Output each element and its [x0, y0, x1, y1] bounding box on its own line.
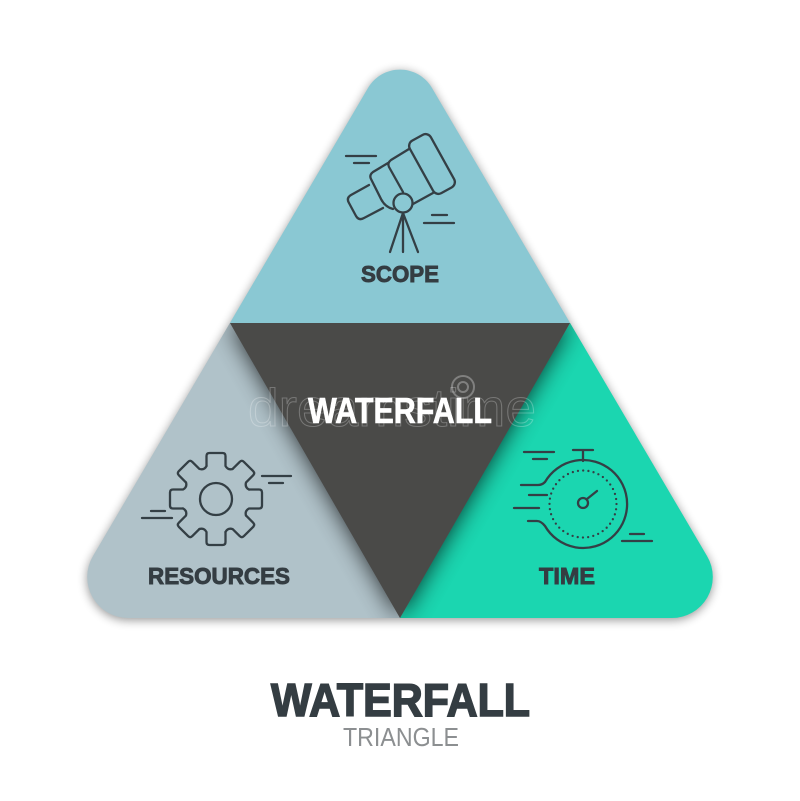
- label: scope: SCOPE: [361, 261, 439, 287]
- waterfall triangle diagram: [87, 70, 713, 618]
- label: resources: RESOURCES: [148, 563, 290, 589]
- panel: centre triangle: [230, 323, 570, 618]
- subtitle: TRIANGLE: [343, 722, 459, 752]
- centre triangle shadow: [230, 323, 570, 618]
- panel: scope background: [230, 70, 570, 323]
- icon: stopwatch: [514, 450, 652, 548]
- panel: resources background: [87, 323, 400, 618]
- title: WATERFALL: [271, 674, 530, 726]
- panel: time background: [400, 323, 713, 618]
- infographic canvas: [81, 65, 719, 746]
- watermark: dreamstime: [248, 379, 536, 438]
- icon: gear: [142, 453, 291, 545]
- triangle drop shadow: [87, 72, 713, 620]
- centre heading: WATERFALL: [308, 390, 492, 431]
- label: time: TIME: [539, 563, 595, 589]
- icon: telescope: [346, 132, 457, 252]
